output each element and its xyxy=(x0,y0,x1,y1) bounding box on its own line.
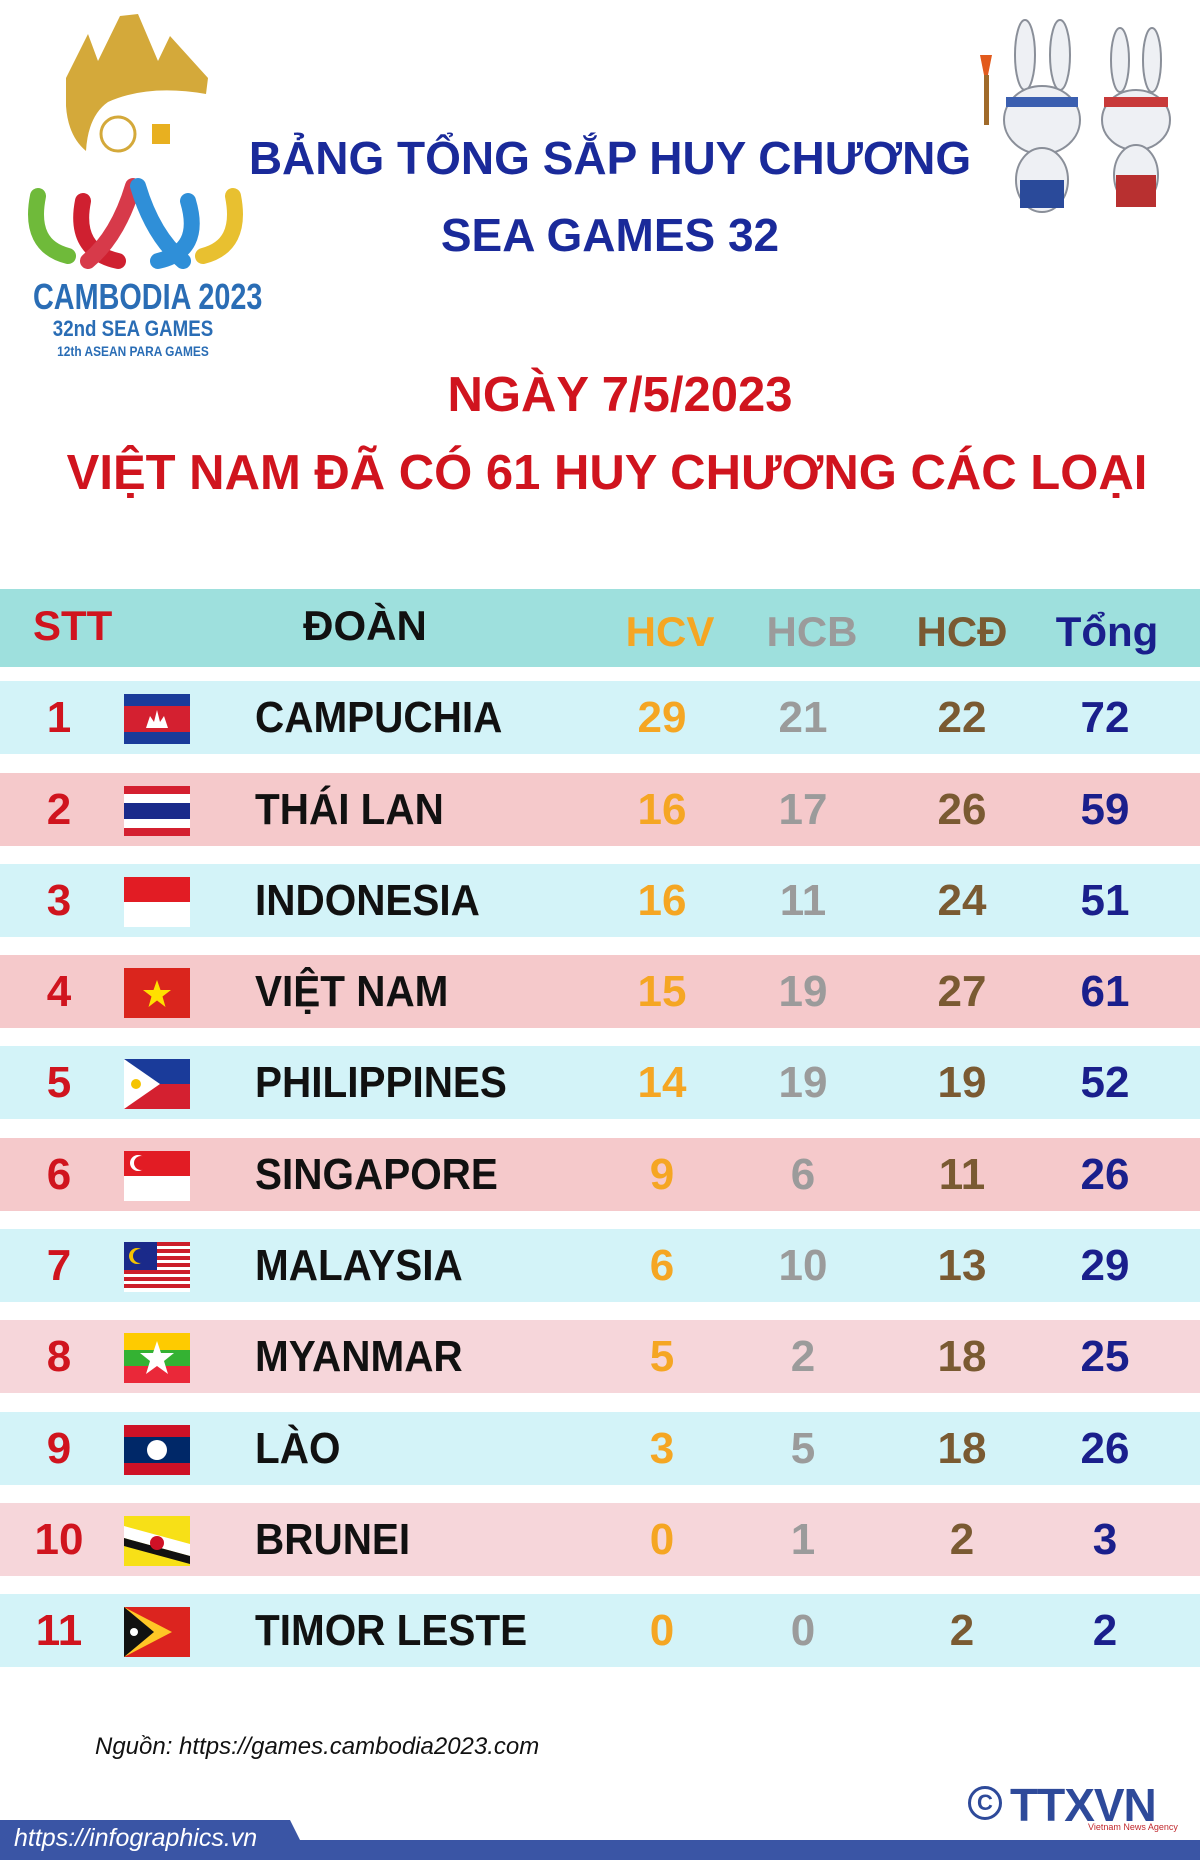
row: Philippines xyxy=(0,1046,1200,1119)
row: Lào xyxy=(0,1412,1200,1485)
logo: TTXVN: Vietnam News Agency xyxy=(1088,1822,1178,1832)
row: Philippines: 14 xyxy=(638,1058,686,1107)
row: Philippines: 19 xyxy=(938,1058,986,1107)
logo: TTXVN: TTXVN xyxy=(1010,1779,1156,1831)
table header: Tổng xyxy=(1056,608,1158,655)
row: Timor Leste xyxy=(0,1594,1200,1667)
table header: HCB xyxy=(766,608,858,655)
subtitle: NGÀY 7/5/2023 xyxy=(447,368,793,422)
row: Singapore: 6 xyxy=(791,1150,815,1199)
row: Myanmar: 2 xyxy=(791,1332,815,1381)
row: Campuchia: 29 xyxy=(638,693,686,742)
row: Brunei: 0 xyxy=(650,1515,674,1564)
row: Myanmar: 18 xyxy=(938,1332,986,1381)
logo: Cambodia 2023: 32nd SEA GAMES xyxy=(53,316,213,341)
logo: Cambodia 2023 xyxy=(28,14,262,359)
row: Lào: LÀO xyxy=(255,1424,340,1473)
row: Thái Lan: 59 xyxy=(1081,785,1129,834)
row: Singapore: 11 xyxy=(939,1150,985,1199)
row: Myanmar: 8 xyxy=(47,1332,71,1381)
row: Timor Leste: 0 xyxy=(791,1606,815,1655)
row: Brunei: 3 xyxy=(1093,1515,1117,1564)
row: Indonesia: 16 xyxy=(638,876,686,925)
row: Lào: 9 xyxy=(47,1424,71,1473)
row: Việt Nam xyxy=(0,955,1200,1028)
row: Singapore: SINGAPORE xyxy=(255,1150,498,1199)
title xyxy=(249,132,971,261)
row: Indonesia: 51 xyxy=(1081,876,1129,925)
footer bar xyxy=(0,1820,1200,1860)
table rows xyxy=(0,681,1200,1667)
row: Campuchia: 22 xyxy=(938,693,986,742)
row: Philippines: 5 xyxy=(47,1058,71,1107)
row: Malaysia: 10 xyxy=(779,1241,827,1290)
table header: STT xyxy=(33,602,112,649)
row: Myanmar: 5 xyxy=(650,1332,674,1381)
row: Philippines: 19 xyxy=(779,1058,827,1107)
row: Timor Leste: 2 xyxy=(950,1606,974,1655)
row: Malaysia: 7 xyxy=(47,1241,71,1290)
row: Timor Leste: 11 xyxy=(36,1606,82,1655)
row: Brunei xyxy=(0,1503,1200,1576)
icon: golden crown xyxy=(66,14,208,151)
row: Lào: 5 xyxy=(791,1424,815,1473)
row: Malaysia: MALAYSIA xyxy=(255,1241,463,1290)
title: SEA GAMES 32 xyxy=(441,209,779,261)
row: Philippines: 52 xyxy=(1081,1058,1129,1107)
icon: mascots xyxy=(980,19,1171,213)
row: Thái Lan: 2 xyxy=(47,785,71,834)
row: Indonesia: INDONESIA xyxy=(255,876,480,925)
row: Malaysia: 29 xyxy=(1081,1241,1129,1290)
subtitle: VIỆT NAM ĐÃ CÓ 61 HUY CHƯƠNG CÁC LOẠI xyxy=(67,446,1147,500)
row: Campuchia: 1 xyxy=(47,693,71,742)
row: Brunei: 10 xyxy=(35,1515,83,1564)
logo: Cambodia 2023: 12th ASEAN PARA GAMES xyxy=(57,343,209,359)
row: Malaysia xyxy=(0,1229,1200,1302)
row: Việt Nam: 4 xyxy=(47,967,71,1016)
logo: TTXVN xyxy=(968,1779,1178,1832)
row: Timor Leste: 2 xyxy=(1093,1606,1117,1655)
row: Indonesia: 3 xyxy=(47,876,71,925)
row: Lào: 3 xyxy=(650,1424,674,1473)
row: Indonesia xyxy=(0,864,1200,937)
title: BẢNG TỔNG SẮP HUY CHƯƠNG xyxy=(249,132,971,184)
row: Timor Leste: TIMOR LESTE xyxy=(255,1606,527,1655)
row: Campuchia: 21 xyxy=(779,693,827,742)
row: Thái Lan: 17 xyxy=(779,785,827,834)
source note: Nguồn: https://games.cambodia2023.com xyxy=(95,1733,539,1760)
row: Việt Nam: 15 xyxy=(638,967,686,1016)
row: Philippines: PHILIPPINES xyxy=(255,1058,507,1107)
logo: Cambodia 2023: CAMBODIA 2023 xyxy=(33,276,262,317)
row: Myanmar: 25 xyxy=(1081,1332,1129,1381)
table header: ĐOÀN xyxy=(303,602,427,649)
row: Singapore: 6 xyxy=(47,1150,71,1199)
footer bar: https://infographics.vn xyxy=(14,1824,257,1852)
row: Thái Lan: 26 xyxy=(938,785,986,834)
row: Brunei: 1 xyxy=(791,1515,815,1564)
row: Malaysia: 13 xyxy=(938,1241,986,1290)
table header: HCV xyxy=(626,608,714,655)
row: Campuchia xyxy=(0,681,1200,754)
row: Malaysia: 6 xyxy=(650,1241,674,1290)
row: Myanmar xyxy=(0,1320,1200,1393)
row: Indonesia: 24 xyxy=(938,876,986,925)
row: Lào: 26 xyxy=(1081,1424,1129,1473)
row: Brunei: 2 xyxy=(950,1515,974,1564)
row: Indonesia: 11 xyxy=(780,876,826,925)
row: Việt Nam: 19 xyxy=(779,967,827,1016)
row: Timor Leste: 0 xyxy=(650,1606,674,1655)
row: Thái Lan: 16 xyxy=(638,785,686,834)
row: Myanmar: MYANMAR xyxy=(255,1332,463,1381)
row: Lào: 18 xyxy=(938,1424,986,1473)
row: Thái Lan: THÁI LAN xyxy=(255,785,444,834)
row: Việt Nam: 27 xyxy=(938,967,986,1016)
table header xyxy=(0,589,1200,667)
row: Campuchia: CAMPUCHIA xyxy=(255,693,502,742)
table header: HCĐ xyxy=(916,608,1008,655)
row: Brunei: BRUNEI xyxy=(255,1515,410,1564)
row: Việt Nam: VIỆT NAM xyxy=(255,967,448,1016)
logo: TTXVN: C xyxy=(977,1790,993,1815)
subtitle xyxy=(67,368,1147,500)
row: Singapore: 9 xyxy=(650,1150,674,1199)
row: Singapore: 26 xyxy=(1081,1150,1129,1199)
row: Singapore xyxy=(0,1138,1200,1211)
row: Thái Lan xyxy=(0,773,1200,846)
row: Việt Nam: 61 xyxy=(1081,967,1129,1016)
row: Campuchia: 72 xyxy=(1081,693,1129,742)
